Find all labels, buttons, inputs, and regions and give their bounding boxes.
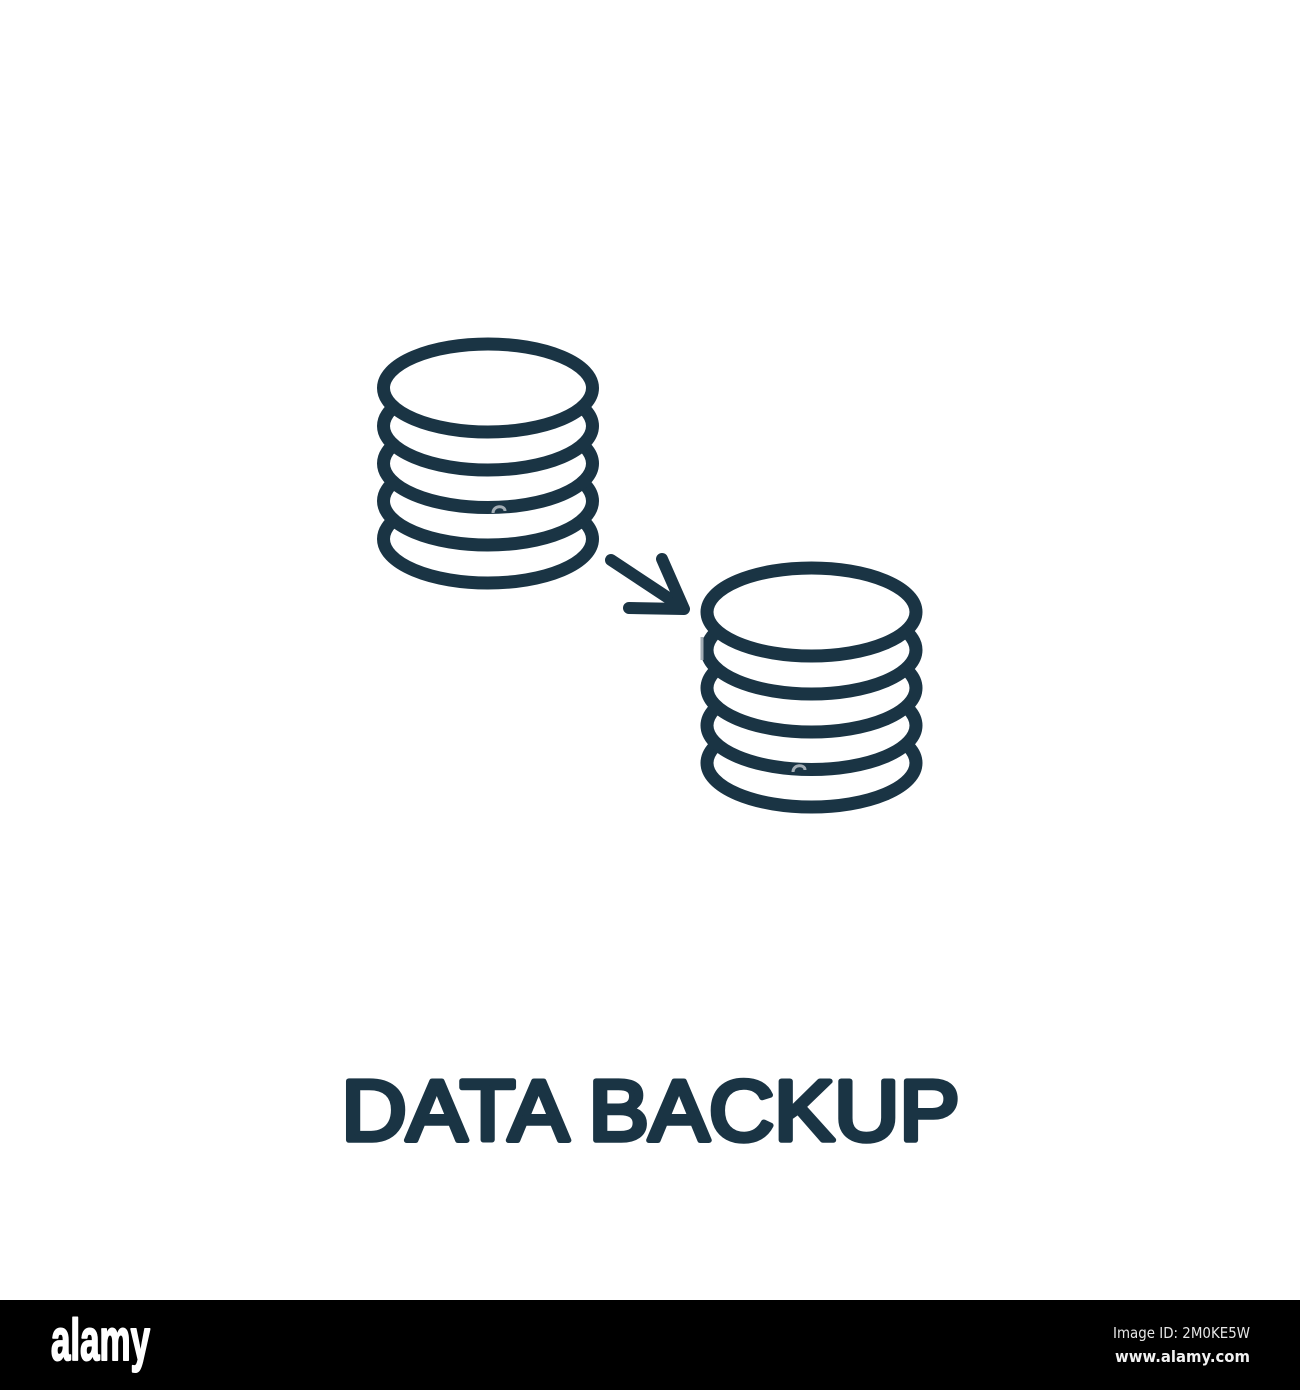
icon: arrow from source to backup — [611, 559, 684, 609]
logo: alamy: alamy — [51, 1308, 150, 1373]
icon: backup database stack — [707, 568, 916, 807]
icon: source database stack — [384, 344, 592, 583]
website url: www.alamy.com — [1115, 1347, 1250, 1366]
footer bar — [0, 1300, 1300, 1390]
image id: Image ID: 2M0KE5W — [1113, 1324, 1250, 1342]
watermark traces on icons — [493, 507, 805, 772]
title: DATA BACKUP — [342, 1064, 960, 1159]
